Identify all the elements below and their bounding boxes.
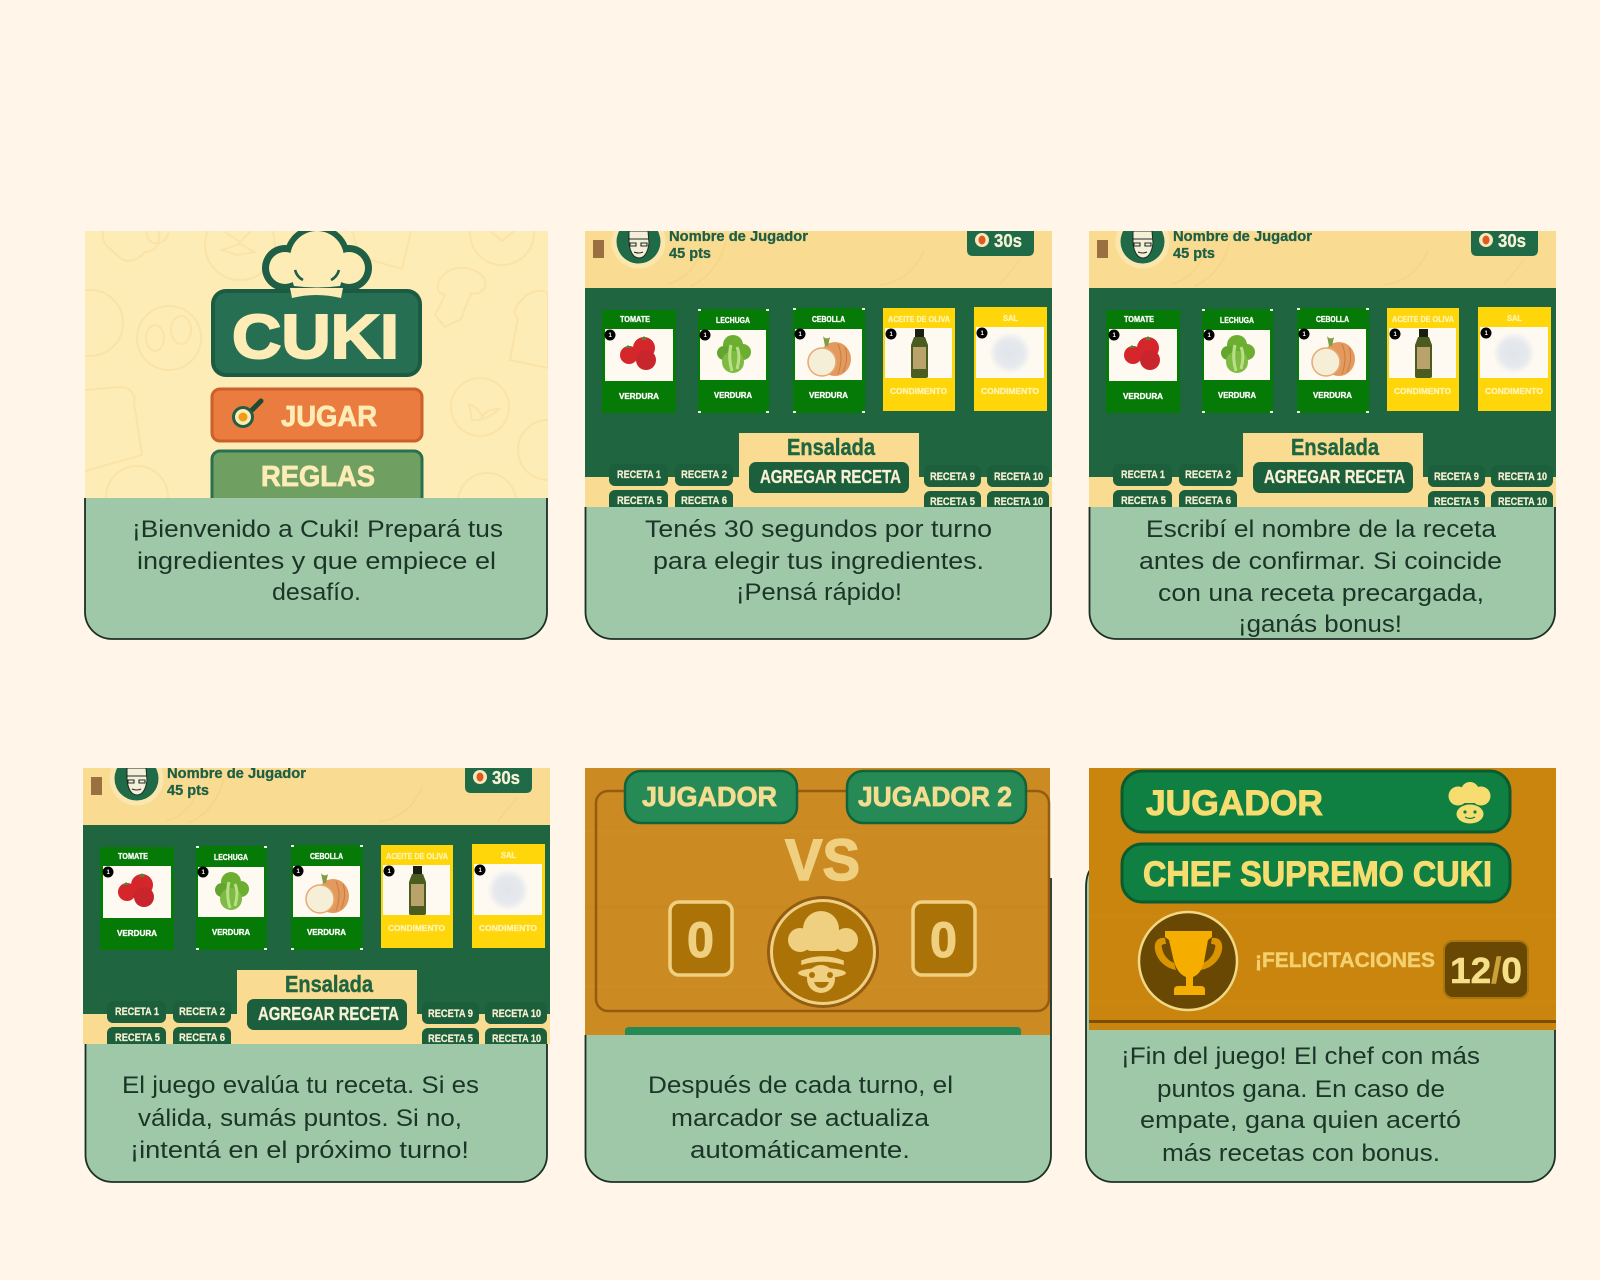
- button: reglas: [212, 451, 422, 505]
- recipe buttons: RECETA 2: [179, 1006, 225, 1018]
- player header: 45 pts: [1173, 245, 1215, 262]
- recipe buttons: RECETA 5: [1121, 495, 1166, 507]
- game screen 3: 1: [1112, 333, 1116, 339]
- ingredient labels: VERDURA: [714, 391, 752, 400]
- ingredient labels: VERDURA: [117, 929, 157, 938]
- score left: 0: [687, 912, 714, 968]
- ingredient labels: VERDURA: [212, 928, 250, 937]
- player 1 tag: JUGADOR: [642, 781, 777, 812]
- game screen 4: 1: [478, 868, 482, 874]
- recipe name box: Ensalada: [285, 971, 373, 997]
- ingredient labels: VERDURA: [307, 928, 346, 937]
- recipe buttons: RECETA 5: [1434, 496, 1479, 508]
- ingredient labels: CONDIMENTO: [1394, 387, 1451, 396]
- player 1 tag: [625, 771, 797, 823]
- player header: Nombre de Jugador: [669, 228, 808, 245]
- recipe buttons: RECETA 9: [428, 1008, 473, 1020]
- panel: evaluacion: [83, 752, 550, 1182]
- recipe buttons: RECETA 1: [1121, 469, 1165, 481]
- timer: [967, 231, 1034, 256]
- ingredient labels: VERDURA: [809, 391, 848, 400]
- ingredient labels: VERDURA: [1123, 392, 1163, 401]
- caption text 2: Tenés 30 segundos por turno: [645, 516, 992, 543]
- player header: [669, 231, 808, 262]
- recipe name box: [739, 433, 919, 493]
- final score: 12/0: [1450, 950, 1522, 991]
- panel: bienvenida: [84, 231, 548, 640]
- score right: 0: [930, 912, 957, 968]
- caption text 3: antes de confirmar. Si coincide: [1139, 548, 1502, 575]
- caption card 1: [85, 498, 547, 639]
- title banner: CHEF SUPREMO CUKI: [1143, 855, 1492, 894]
- player 2 tag: [847, 771, 1026, 823]
- timer: 30s: [1498, 231, 1526, 251]
- ingredient labels: TOMATE: [1124, 315, 1155, 324]
- ingredient labels: [619, 314, 1039, 401]
- ingredient labels: LECHUGA: [716, 316, 750, 325]
- caption card 5: [586, 878, 1051, 1182]
- panel: receta: [1089, 214, 1556, 639]
- CUKI logo: CUKI: [232, 303, 399, 372]
- game screen 2: 1: [980, 331, 984, 337]
- recipe buttons: RECETA 10: [994, 496, 1043, 508]
- recipe buttons: RECETA 9: [1434, 471, 1479, 483]
- recipe buttons: RECETA 1: [115, 1006, 159, 1018]
- menu screen: [85, 231, 548, 498]
- game screen 2: 1: [890, 332, 894, 338]
- ingredient labels: ACEITE DE OLIVA: [888, 315, 950, 324]
- caption text 2: para elegir tus ingredientes.: [653, 548, 984, 575]
- game screen 4: 1: [388, 869, 392, 875]
- caption text 3: con una receta precargada,: [1158, 580, 1484, 607]
- caption card 2: [586, 507, 1051, 639]
- game screen 2: 1: [704, 333, 708, 339]
- score right: [913, 902, 975, 975]
- recipe buttons: RECETA 5: [115, 1032, 160, 1044]
- recipe buttons: RECETA 6: [179, 1032, 225, 1044]
- ingredient labels: LECHUGA: [1220, 316, 1254, 325]
- caption text 5: marcador se actualiza: [671, 1105, 930, 1132]
- ingredient labels: [1123, 314, 1543, 401]
- caption text 4: [122, 1072, 479, 1164]
- game screen 4: 1: [296, 869, 300, 875]
- recipe name box: Ensalada: [787, 434, 875, 460]
- caption text 5: automáticamente.: [690, 1137, 910, 1164]
- game screen 4: [83, 752, 550, 1052]
- green bar: [625, 1027, 1021, 1035]
- player header: 45 pts: [167, 782, 209, 799]
- game screen 3: [1089, 214, 1556, 515]
- ingredient labels: VERDURA: [1313, 391, 1352, 400]
- ingredient labels: [117, 851, 537, 938]
- caption card 4: [86, 1043, 547, 1182]
- player header: [1173, 231, 1312, 262]
- ingredient labels: CEBOLLA: [1316, 315, 1349, 324]
- caption text 6: [1121, 1043, 1480, 1167]
- caption text 1: desafío.: [272, 579, 361, 606]
- game screen 3: 1: [1208, 333, 1212, 339]
- final score: [1444, 941, 1528, 998]
- recipe buttons: RECETA 10: [994, 471, 1043, 483]
- caption text 1: ¡Bienvenido a Cuki! Prepará tus: [132, 516, 503, 543]
- chef hat logo: [262, 231, 372, 289]
- winner screen: [1089, 768, 1556, 1030]
- VS: VS: [785, 828, 860, 893]
- recipe buttons: RECETA 10: [1498, 496, 1547, 508]
- recipe name box: AGREGAR RECETA: [760, 467, 901, 487]
- button: reglas: REGLAS: [261, 461, 375, 493]
- caption text 3: Escribí el nombre de la receta: [1146, 516, 1497, 543]
- recipe buttons: [1113, 470, 1553, 507]
- ingredient labels: CONDIMENTO: [479, 924, 537, 933]
- CUKI logo: [211, 288, 422, 377]
- caption text 3: [1139, 516, 1502, 638]
- ingredient labels: CONDIMENTO: [890, 387, 947, 396]
- ingredient labels: VERDURA: [619, 392, 659, 401]
- game screen 4: 1: [106, 870, 110, 876]
- ingredient labels: SAL: [1003, 314, 1018, 323]
- recipe buttons: RECETA 10: [492, 1008, 541, 1020]
- player banner: JUGADOR: [1146, 784, 1323, 823]
- caption text 2: ¡Pensá rápido!: [736, 579, 902, 606]
- button: jugar: JUGAR: [281, 401, 377, 433]
- caption card 3: [1090, 507, 1555, 639]
- caption text 6: ¡Fin del juego! El chef con más: [1121, 1043, 1480, 1070]
- ingredient labels: CONDIMENTO: [388, 924, 445, 933]
- player header: [167, 768, 306, 798]
- timer: 30s: [492, 768, 520, 788]
- recipe buttons: RECETA 10: [492, 1033, 541, 1045]
- panel: turno: [585, 214, 1052, 639]
- ingredient labels: SAL: [501, 851, 516, 860]
- ingredient labels: TOMATE: [118, 852, 149, 861]
- caption text 5: [648, 1072, 953, 1164]
- caption text 4: válida, sumás puntos. Si no,: [138, 1105, 462, 1132]
- ingredient labels: ACEITE DE OLIVA: [386, 852, 448, 861]
- caption text 5: Después de cada turno, el: [648, 1072, 953, 1099]
- game screen 2: [585, 214, 1052, 515]
- ingredient labels: LECHUGA: [214, 853, 248, 862]
- game screen 2: 1: [608, 333, 612, 339]
- recipe name box: [237, 970, 417, 1030]
- game screen 3: 1: [1484, 331, 1488, 337]
- chef medallion: [767, 896, 879, 1008]
- player header: 45 pts: [669, 245, 711, 262]
- recipe buttons: RECETA 2: [681, 469, 727, 481]
- recipe name box: AGREGAR RECETA: [258, 1004, 399, 1024]
- ingredient labels: CONDIMENTO: [1485, 387, 1543, 396]
- caption text 4: El juego evalúa tu receta. Si es: [122, 1072, 479, 1099]
- caption text 1: [132, 516, 503, 606]
- ingredient labels: CEBOLLA: [812, 315, 845, 324]
- ingredient labels: SAL: [1507, 314, 1522, 323]
- caption text 4: ¡intentá en el próximo turno!: [130, 1137, 469, 1164]
- recipe buttons: [107, 1007, 547, 1044]
- caption text 6: más recetas con bonus.: [1162, 1140, 1440, 1167]
- caption text 6: puntos gana. En caso de: [1157, 1076, 1445, 1103]
- congratulations: ¡FELICITACIONES: [1255, 949, 1435, 972]
- recipe buttons: RECETA 9: [930, 471, 975, 483]
- ingredient labels: TOMATE: [620, 315, 651, 324]
- button: jugar: [212, 389, 422, 441]
- game screen 2: 1: [798, 332, 802, 338]
- caption text 3: ¡ganás bonus!: [1238, 611, 1402, 638]
- ingredient labels: CONDIMENTO: [981, 387, 1039, 396]
- game screen 3: 1: [1394, 332, 1398, 338]
- timer: [1471, 231, 1538, 256]
- recipe buttons: RECETA 6: [681, 495, 727, 507]
- recipe name box: AGREGAR RECETA: [1264, 467, 1405, 487]
- player 2 tag: JUGADOR 2: [858, 781, 1012, 812]
- recipe buttons: RECETA 10: [1498, 471, 1547, 483]
- game screen 3: 1: [1302, 332, 1306, 338]
- recipe buttons: [609, 470, 1049, 507]
- recipe buttons: RECETA 2: [1185, 469, 1231, 481]
- player banner: [1122, 771, 1510, 832]
- ingredient labels: ACEITE DE OLIVA: [1392, 315, 1454, 324]
- recipe buttons: RECETA 1: [617, 469, 661, 481]
- ingredient labels: CEBOLLA: [310, 852, 343, 861]
- trophy medallion: [1139, 912, 1237, 1010]
- timer: [465, 768, 532, 793]
- caption card 6: [1086, 870, 1555, 1182]
- recipe name box: Ensalada: [1291, 434, 1379, 460]
- player header: Nombre de Jugador: [1173, 228, 1312, 245]
- panel: marcador: [585, 768, 1051, 1182]
- caption text 1: ingredientes y que empiece el: [137, 548, 496, 575]
- recipe buttons: RECETA 5: [617, 495, 662, 507]
- player header: Nombre de Jugador: [167, 765, 306, 782]
- caption text 6: empate, gana quien acertó: [1140, 1107, 1461, 1134]
- recipe buttons: RECETA 6: [1185, 495, 1231, 507]
- ingredient labels: VERDURA: [1218, 391, 1256, 400]
- recipe name box: [1243, 433, 1423, 493]
- recipe buttons: RECETA 5: [428, 1033, 473, 1045]
- scoreboard screen: [585, 768, 1050, 1035]
- timer: 30s: [994, 231, 1022, 251]
- panel: final: [1086, 768, 1556, 1182]
- score left: [670, 902, 732, 975]
- caption text 2: [645, 516, 992, 606]
- recipe buttons: RECETA 5: [930, 496, 975, 508]
- game screen 4: 1: [202, 870, 206, 876]
- title banner: [1122, 844, 1510, 902]
